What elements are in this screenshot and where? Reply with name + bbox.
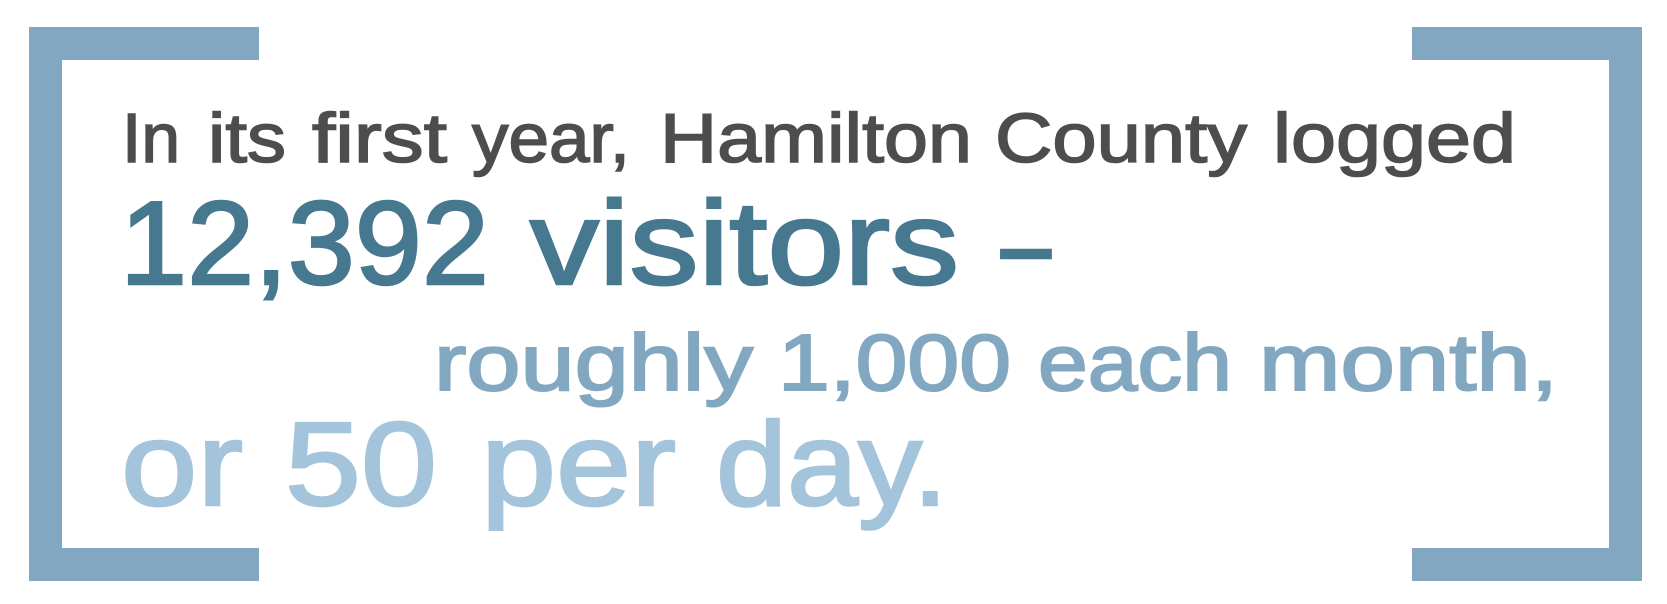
text: 12,392 visitors –: – xyxy=(1001,177,1052,310)
text: or 50 per day.: per xyxy=(481,398,676,531)
text: In its first year, Hamilton County logged: year, xyxy=(472,99,630,177)
text: In its first year, Hamilton County logged: In xyxy=(122,99,180,177)
text: or 50 per day.: 50 xyxy=(285,398,437,531)
text: roughly 1,000 each month,: each xyxy=(1038,318,1232,407)
text: roughly 1,000 each month,: month, xyxy=(1259,318,1558,407)
text: 12,392 visitors –: visitors xyxy=(530,177,959,310)
text: In its first year, Hamilton County logged: Hamilton xyxy=(660,99,972,177)
text: roughly 1,000 each month,: 1,000 xyxy=(778,318,1011,407)
text: In its first year, Hamilton County logged: its xyxy=(208,99,286,177)
text: or 50 per day.: day. xyxy=(716,398,948,531)
bracket: top left xyxy=(29,27,259,581)
text: In its first year, Hamilton County logged xyxy=(122,99,1516,177)
text: or 50 per day. xyxy=(121,398,948,531)
text: In its first year, Hamilton County logged: County xyxy=(995,99,1247,177)
text: 12,392 visitors – xyxy=(120,177,1052,310)
text: 12,392 visitors –: 12,392 xyxy=(120,177,489,310)
text: roughly 1,000 each month,: roughly xyxy=(434,318,753,407)
bracket: top right xyxy=(1412,27,1642,581)
text: In its first year, Hamilton County logged: logged xyxy=(1273,99,1516,177)
text: or 50 per day.: or xyxy=(121,398,243,531)
text: In its first year, Hamilton County logged: first xyxy=(312,99,447,177)
text: roughly 1,000 each month, xyxy=(434,318,1558,407)
